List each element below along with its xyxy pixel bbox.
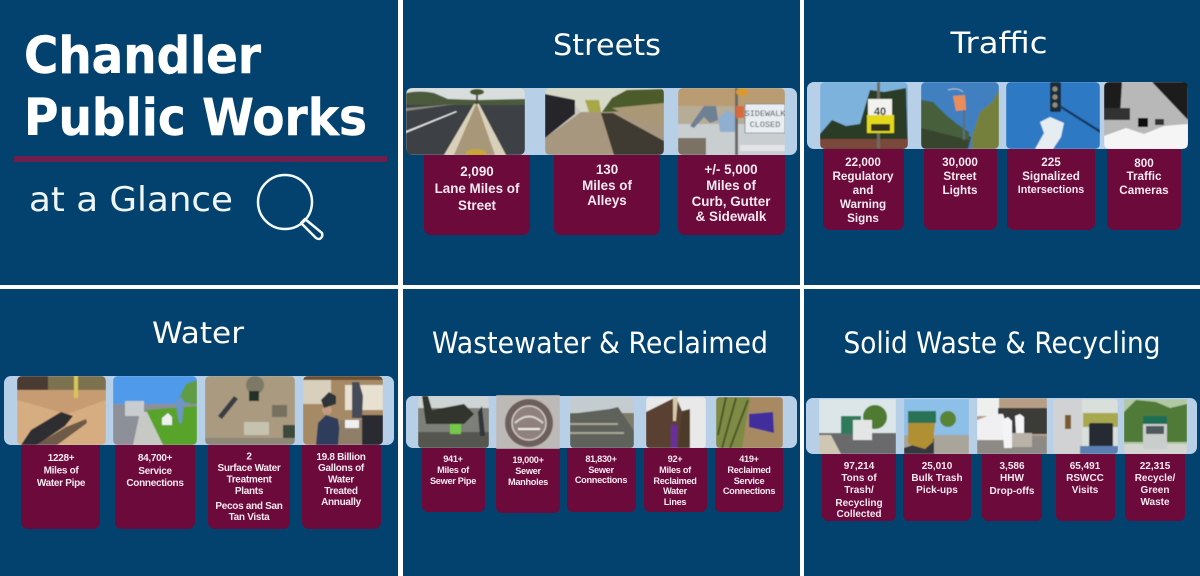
card: treatment plants: Plants [235, 486, 264, 497]
card: water pipe: Water Pipe [37, 478, 86, 489]
card: HHW drop-offs: Drop-offs [990, 486, 1035, 497]
card: tons collected: Collected [836, 509, 882, 520]
card: sewer connections [567, 445, 636, 512]
card: tons collected: Tons of [841, 473, 877, 484]
heading: Water: Water [152, 316, 245, 350]
card: sewer pipe [422, 445, 485, 512]
image strip [406, 396, 797, 448]
card: reclaimed service connections: Reclaimed [727, 465, 771, 475]
card: lane miles [424, 150, 530, 235]
card: tons collected: 97,214 [844, 461, 875, 472]
card: bulk trash [903, 450, 971, 521]
card: signs: 22,000 [845, 156, 881, 169]
card: alleys [554, 150, 660, 235]
card: curb gutter sidewalk: & Sidewalk [696, 209, 767, 224]
photo: sidewalk repair: SIDEWALK [745, 109, 786, 119]
card: bulk trash: Bulk Trash [911, 473, 963, 484]
subtitle: at a Glance: at a Glance [29, 180, 233, 220]
card: intersections [1007, 145, 1095, 230]
card: sewer connections: Sewer [588, 465, 615, 475]
card: alleys: 130 [596, 162, 618, 177]
card: lane miles: 2,090 [460, 164, 494, 179]
card: street lights [924, 145, 997, 230]
card: reclaimed service connections: 419+ [739, 454, 759, 464]
photo: street median [406, 88, 525, 157]
card: sewer pipe: Miles of [437, 465, 470, 475]
image strip [807, 82, 1188, 149]
photo: water pipe trench [17, 376, 106, 445]
card: service connections: Service [138, 466, 172, 477]
card: recycle and green waste: Green [1141, 485, 1169, 496]
card: reclaimed water lines: 92+ [668, 454, 682, 464]
image strip [406, 88, 797, 155]
photo: sewer connections [570, 397, 634, 448]
card: gallons treated: Gallons of [318, 463, 365, 474]
card: tons collected [822, 450, 896, 521]
card: curb gutter sidewalk: Curb, Gutter [692, 194, 771, 209]
photo: treatment plant aerial [205, 376, 295, 445]
card: cameras: Cameras [1119, 184, 1169, 197]
card: street lights: Lights [942, 184, 978, 197]
card: treatment plants: Pecos and San [215, 501, 283, 512]
card: tons collected: Recycling [835, 498, 883, 509]
panel: streets [403, 0, 800, 285]
card: curb gutter sidewalk [678, 150, 785, 235]
card: reclaimed service connections: Service [734, 476, 764, 486]
card: gallons treated: Water [328, 474, 354, 486]
panel: wastewater and reclaimed [403, 289, 800, 576]
heading: Traffic: Traffic [949, 26, 1048, 60]
card: cameras: 800 [1134, 157, 1154, 170]
card: gallons treated: 19.8 Billion [316, 452, 366, 463]
card: HHW drop-offs: 3,586 [999, 461, 1025, 472]
card: gallons treated: Annually [321, 497, 362, 508]
card: RSWCC visits: Visits [1072, 485, 1099, 496]
card: service connections: Connections [126, 478, 184, 489]
photo: traffic signal [1006, 82, 1100, 149]
title: Chandler Public Works [24, 27, 367, 148]
panel: title [0, 0, 398, 285]
card: recycle and green waste [1125, 450, 1185, 521]
photo: sewer manhole [496, 395, 560, 449]
card: water pipe: 1228+ [48, 453, 75, 464]
card: recycle and green waste: 22,315 [1140, 461, 1171, 472]
card: sewer manholes: 19,000+ [512, 455, 544, 465]
heading: Solid Waste & Recycling: Solid Waste & Recycling [844, 326, 1160, 360]
card: intersections: 225 [1041, 156, 1061, 169]
card: HHW drop-offs: HHW [1000, 473, 1024, 484]
card: recycle and green waste: Recycle/ [1135, 473, 1176, 484]
photo: reclaimed sign [716, 397, 783, 448]
card: sewer connections: 81,830+ [585, 454, 617, 464]
card: alleys: Alleys [587, 193, 627, 208]
card: reclaimed water lines: Lines [664, 497, 686, 507]
title: Chandler Public Works: Public Works [24, 89, 367, 148]
card: sewer connections: Connections [575, 475, 627, 485]
card: gallons treated: Treated [324, 486, 358, 497]
image strip [4, 376, 394, 445]
card: cameras: Traffic [1126, 170, 1162, 183]
card: reclaimed service connections [715, 445, 783, 512]
photo: service connection [113, 376, 197, 445]
card: reclaimed water lines [644, 445, 707, 512]
card: signs: Signs [847, 212, 879, 225]
card: alleys: Miles of [582, 178, 632, 193]
card: RSWCC visits: 65,491 [1070, 461, 1101, 472]
card: intersections: Intersections [1018, 184, 1084, 196]
card: curb gutter sidewalk: Miles of [706, 178, 756, 193]
card: street lights: Street [943, 170, 977, 183]
card: treatment plants: Tan Vista [229, 512, 270, 523]
card: water pipe: Miles of [44, 466, 79, 476]
photo: speed sign: 40 [874, 106, 886, 118]
card: service connections [115, 441, 195, 529]
card: signs [823, 145, 904, 230]
heading: Streets: Streets [553, 28, 661, 62]
card: water pipe [21, 441, 100, 529]
card: lane miles: Lane Miles of [435, 181, 520, 196]
photo: sidewalk repair [678, 88, 786, 155]
photo: HHW drop-off [977, 398, 1047, 454]
card: tons collected: Trash/ [844, 485, 874, 496]
card: reclaimed water lines: Water [663, 486, 688, 496]
card: RSWCC visits: RSWCC [1066, 473, 1104, 484]
card: sewer pipe: 941+ [443, 454, 463, 464]
panel: solid waste and recycling [804, 289, 1200, 576]
photo: bulk trash truck [904, 399, 969, 454]
card: curb gutter sidewalk: +/- 5,000 [704, 162, 758, 177]
card: treatment plants: Surface Water [218, 463, 281, 474]
photo: garbage truck [819, 399, 896, 454]
photo: control room [303, 376, 383, 445]
card: sewer manholes [496, 445, 560, 513]
heading: Wastewater & Reclaimed: Wastewater & Reclaimed [432, 326, 768, 360]
photo: alley [545, 88, 664, 155]
card: RSWCC visits [1056, 450, 1115, 521]
card: treatment plants [208, 441, 290, 529]
panel: traffic [804, 0, 1200, 285]
card: sewer manholes: Sewer [515, 466, 542, 476]
panel: water [0, 289, 398, 576]
card: service connections: 84,700+ [138, 453, 173, 464]
card: treatment plants: Treatment [226, 474, 273, 486]
card: cameras [1107, 145, 1181, 230]
card: bulk trash: 25,010 [922, 461, 953, 472]
card: HHW drop-offs [982, 450, 1042, 521]
card: signs: Regulatory [832, 170, 894, 183]
card: sewer pipe: Sewer Pipe [430, 476, 476, 486]
card: reclaimed water lines: Reclaimed [653, 476, 697, 486]
card: sewer manholes: Manholes [508, 477, 548, 487]
card: lane miles: Street [458, 198, 497, 213]
card: signs: Warning [840, 198, 886, 211]
card: reclaimed service connections: Connections [723, 486, 775, 496]
photo: RSWCC visit [1053, 399, 1118, 454]
card: recycle and green waste: Waste [1140, 497, 1170, 508]
card: bulk trash: Pick-ups [916, 485, 958, 496]
photo: speed sign [820, 82, 908, 150]
card: gallons treated [302, 441, 381, 529]
photo: sidewalk repair: CLOSED [750, 120, 780, 130]
card: reclaimed water lines: Miles of [659, 465, 692, 475]
icon: magnifying glass [258, 175, 322, 239]
card: intersections: Signalized [1022, 170, 1080, 183]
photo: sewer pipe work [418, 396, 489, 448]
title: Chandler Public Works: Chandler [24, 27, 261, 86]
card: treatment plants: 2 [246, 452, 252, 462]
photo: traffic camera view [1104, 82, 1188, 149]
photo: reclaimed water lines [646, 397, 706, 448]
card: signs: and [853, 184, 873, 197]
card: street lights: 30,000 [942, 156, 978, 169]
photo: recycle truck [1124, 399, 1187, 454]
image strip [806, 398, 1197, 454]
photo: street lights [921, 82, 999, 149]
